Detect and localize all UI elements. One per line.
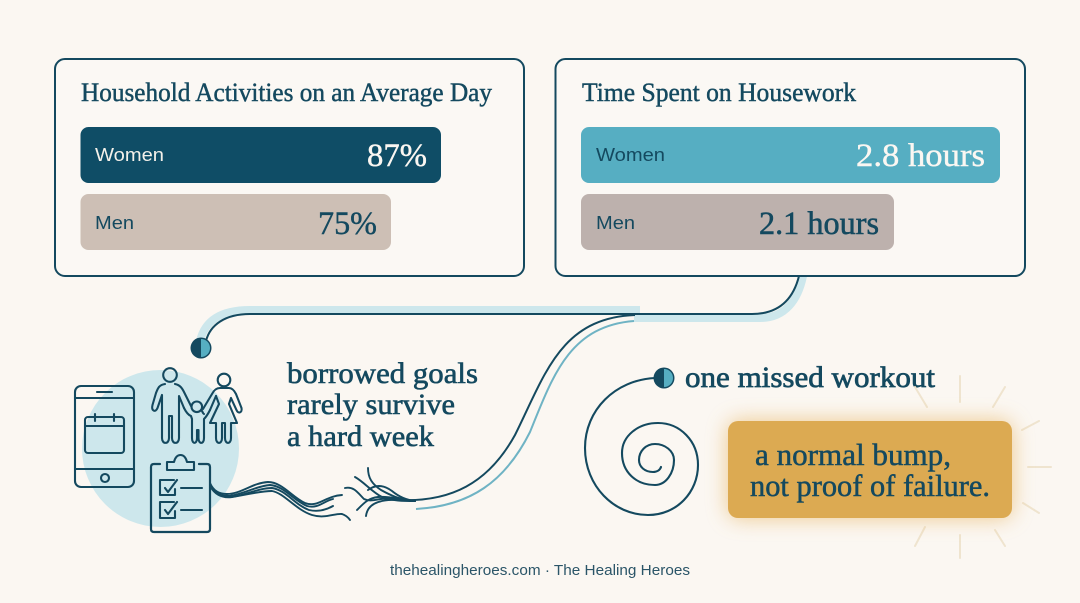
text: borrowed goals: rarely survive — [287, 388, 455, 421]
panel: time spent on housework — [556, 59, 1025, 276]
heading: time spent on housework: Time Spent on Housework — [582, 78, 856, 107]
text: borrowed goals: borrowed goals — [287, 357, 478, 390]
heading: household activities: Household Activities on an Average Day — [81, 78, 492, 107]
bar: men 75%: Men — [95, 213, 134, 233]
text: one missed workout: one missed workout — [685, 361, 936, 394]
bar: women 87%: 87% — [367, 138, 427, 174]
icon: half-filled dot at thread end — [190, 338, 212, 358]
bar: men 2.1 hours: 2.1 hours — [759, 206, 879, 242]
connector: frayed thread — [210, 468, 415, 520]
callout: a normal bump: a normal bump, — [755, 437, 951, 472]
panel: household activities — [55, 59, 524, 276]
callout: a normal bump — [728, 421, 1012, 518]
connector: upper thread from panel to dot — [200, 276, 803, 341]
bar: women 2.8 hours: Women — [596, 145, 665, 165]
text: borrowed goals: a hard week — [287, 420, 434, 453]
icon: half-filled dot on spiral — [654, 368, 674, 388]
connector: lower thread rising to upper line — [400, 315, 635, 509]
footer credit: thehealingheroes.com · The Healing Heroes — [390, 563, 690, 579]
icon: pale blue circle — [82, 370, 239, 527]
icon: sun rays — [915, 376, 1051, 558]
callout: a normal bump: not proof of failure. — [750, 468, 990, 503]
bar: men 2.1 hours: Men — [596, 213, 635, 233]
bar: women 87% — [80, 127, 441, 183]
bar: men 75% — [80, 194, 391, 250]
bar: women 87%: Women — [95, 145, 164, 165]
icon: clipboard checklist — [151, 455, 210, 532]
text: borrowed goals — [287, 357, 478, 453]
bar: men 75%: 75% — [318, 206, 377, 242]
bar: men 2.1 hours — [581, 194, 894, 250]
icon: family holding hands — [152, 368, 242, 443]
callout: glow — [728, 421, 1012, 518]
icon: spiral — [585, 378, 698, 515]
bar: women 2.8 hours — [581, 127, 1000, 183]
icon: phone with calendar — [75, 386, 134, 487]
bar: women 2.8 hours: 2.8 hours — [856, 138, 985, 174]
